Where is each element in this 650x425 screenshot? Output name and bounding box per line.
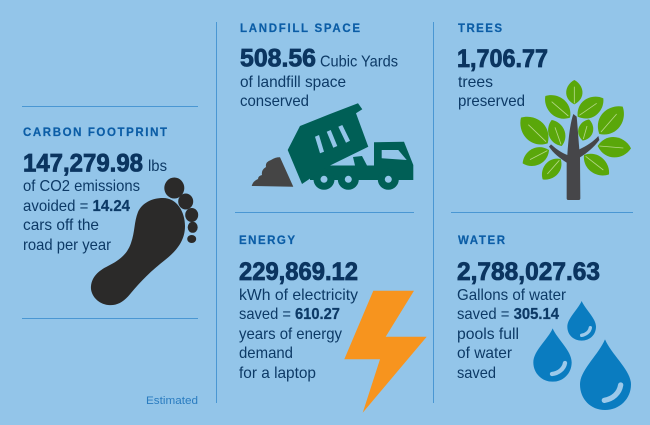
text: carbon description: cars off the xyxy=(23,217,99,234)
icon: lightning bolt xyxy=(344,291,427,413)
stat: energy: 229,869.12 xyxy=(239,258,358,286)
text: landfill description: conserved xyxy=(240,93,309,110)
stat: landfill space: 508.56 xyxy=(240,44,316,72)
icon: dump truck xyxy=(252,103,413,190)
panel: water xyxy=(457,235,631,410)
stat: trees: 1,706.77 xyxy=(457,45,548,73)
text: energy description: demand xyxy=(239,345,293,362)
panel: energy xyxy=(239,235,427,413)
panel: landfill space xyxy=(240,23,413,190)
text: water description xyxy=(457,287,567,382)
text: water description: Gallons of water xyxy=(457,287,567,304)
text: carbon description: road per year xyxy=(23,237,112,254)
icon: water drops xyxy=(533,301,631,410)
stat: carbon footprint: 147,279.98 xyxy=(23,150,143,178)
icon: tree xyxy=(520,80,631,200)
text: trees description: trees xyxy=(458,74,493,91)
text: water description: pools full xyxy=(457,326,519,343)
heading: landfill space: LANDFILL SPACE xyxy=(240,23,360,35)
unit: cubic yards: Cubic Yards xyxy=(320,54,398,70)
panel: trees xyxy=(457,23,631,200)
text: energy description: for a laptop xyxy=(239,365,316,382)
note: estimated: Estimated xyxy=(146,395,198,407)
text: carbon description: of CO2 emissions xyxy=(23,178,140,195)
text: water description: saved xyxy=(457,365,496,382)
heading: water: WATER xyxy=(458,235,506,247)
text: water description: of water xyxy=(457,345,513,362)
text: trees description: preserved xyxy=(458,93,525,110)
heading: energy: ENERGY xyxy=(239,235,295,247)
text: trees description xyxy=(458,74,525,110)
text: energy description: years of energy xyxy=(239,326,342,343)
heading: trees: TREES xyxy=(458,23,502,35)
panel: carbon footprint xyxy=(23,127,198,305)
icon: footprint xyxy=(91,178,198,305)
text: landfill description: of landfill space xyxy=(240,74,346,91)
stat: water: 2,788,027.63 xyxy=(457,258,600,286)
text: energy description: saved = 610.27 xyxy=(239,306,340,323)
text: landfill description xyxy=(240,74,346,110)
text: energy description: kWh of electricity xyxy=(239,287,358,304)
text: energy description xyxy=(239,287,358,382)
heading: carbon footprint: CARBON FOOTPRINT xyxy=(23,127,167,139)
text: water description: saved = 305.14 xyxy=(457,306,559,323)
text: carbon description: avoided = 14.24 xyxy=(23,198,130,215)
text: carbon description xyxy=(23,178,140,254)
unit: lbs: lbs xyxy=(148,158,167,175)
